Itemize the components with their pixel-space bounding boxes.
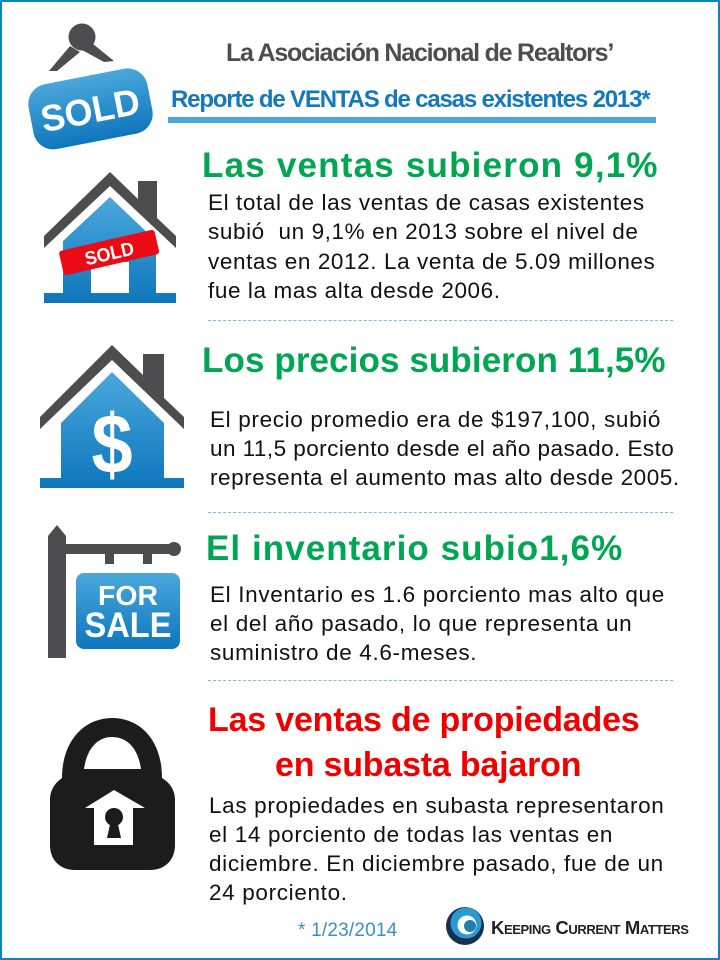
- icon: house with sold banner: [44, 172, 176, 303]
- icon: keeping current matters logo: [446, 907, 484, 945]
- icon: for sale sign: SALE: [84, 606, 172, 645]
- text: foreclosures: Las propiedades en subasta representaron: [209, 793, 664, 818]
- heading: sales: Las ventas subieron 9,1%: [202, 146, 659, 185]
- heading: association: La Asociación Nacional de Realtors’: [226, 39, 613, 67]
- text: foreclosures: diciembre. En diciembre pasado, fue de un: [209, 851, 664, 876]
- icon: house with dollar sign: $: [91, 397, 133, 491]
- icon: for sale sign: FOR: [98, 580, 158, 611]
- text: sales: subió un 9,1% en 2013 sobre el nivel de: [208, 219, 639, 244]
- heading: report title: Reporte de VENTAS de casas existentes 2013*: [171, 86, 649, 113]
- footnote: date: * 1/23/2014: [298, 920, 397, 941]
- icon: padlock with house: [50, 718, 175, 870]
- text: inventory: el del año pasado, lo que representa un: [210, 611, 632, 636]
- heading: prices: Los precios subieron 11,5%: [202, 341, 666, 380]
- heading: foreclosures: en subasta bajaron: [275, 746, 581, 784]
- text: prices: un 11,5 porciento desde el año pasado. Esto: [210, 436, 674, 461]
- text: prices: [210, 407, 680, 490]
- divider: title underline: [168, 117, 656, 123]
- icon: house with sold banner: SOLD: [83, 239, 136, 270]
- icon: sold sign: SOLD: [37, 81, 143, 140]
- text: sales: ventas en 2012. La venta de 5.09 millones: [208, 249, 655, 274]
- text: foreclosures: [209, 793, 664, 905]
- text: sales: fue la mas alta desde 2006.: [208, 278, 501, 303]
- icon: for sale sign: [48, 525, 181, 658]
- text: prices: representa el aumento mas alto desde 2005.: [210, 465, 680, 490]
- text: foreclosures: el 14 porciento de todas las ventas en: [209, 822, 613, 847]
- heading: foreclosures: [208, 701, 640, 784]
- text: inventory: El Inventario es 1.6 porciento mas alto que: [210, 582, 665, 607]
- icon: house with dollar sign: [40, 345, 184, 491]
- heading: foreclosures: Las ventas de propiedades: [208, 701, 640, 739]
- text: sales: El total de las ventas de casas existentes: [208, 190, 645, 215]
- text: foreclosures: 24 porciento.: [209, 880, 348, 905]
- text: sales: [208, 190, 655, 303]
- icon: sold sign: [25, 24, 156, 153]
- heading: inventory: El inventario subio1,6%: [206, 529, 623, 568]
- text: inventory: [210, 582, 665, 665]
- text: logo wordmark: Keeping Current Matters: [491, 917, 689, 938]
- text: inventory: suministro de 4.6-meses.: [210, 640, 477, 665]
- text: prices: El precio promedio era de $197,100, subió: [210, 407, 661, 432]
